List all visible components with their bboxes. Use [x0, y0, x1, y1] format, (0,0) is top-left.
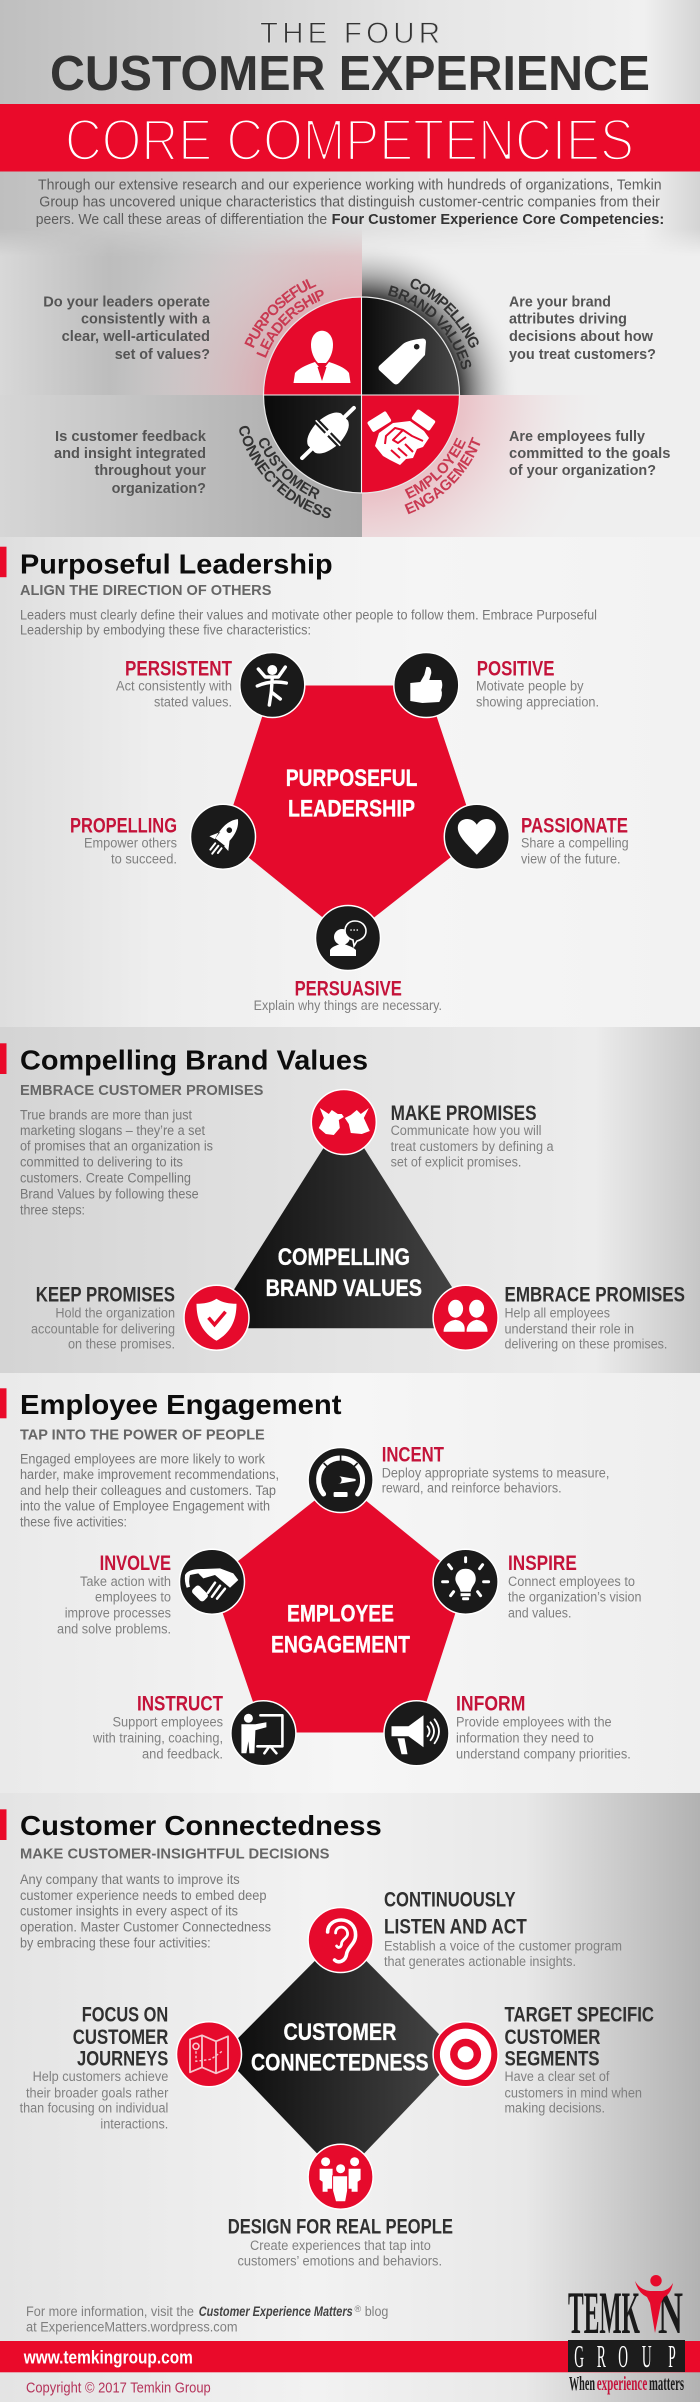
label: incent: Deploy appropriate systems to measure,: [382, 1466, 609, 1481]
label: target specific customer segments: CUSTOMER: [504, 2025, 601, 2049]
label: keep promises: accountable for delivering: [31, 1321, 175, 1336]
label: focus on customer journeys: JOURNEYS: [77, 2047, 168, 2071]
footer note: [26, 2304, 388, 2335]
diamond label: CONNECTEDNESS: [251, 2050, 429, 2077]
body text: into the value of Employee Engagement with: [20, 1499, 270, 1514]
label: keep promises: on these promises.: [68, 1336, 175, 1351]
label: inform: Provide employees with the: [456, 1715, 612, 1730]
panel: header and competency overview: [0, 0, 700, 537]
footer band: www.temkingroup.com: [23, 2346, 193, 2367]
icon: embrace promises people: [433, 1285, 498, 1350]
label: make promises: treat customers by defining a: [391, 1139, 554, 1154]
question: brand: you treat customers?: [509, 347, 656, 363]
label: continuously listen and act: Establish a voice of the customer program: [384, 1939, 622, 1954]
icon: keep promises shield: [184, 1285, 249, 1350]
label: focus on customer journeys: FOCUS ON: [82, 2003, 168, 2027]
question: customer feedback: organization?: [112, 481, 206, 497]
label: instruct: INSTRUCT: [137, 1692, 223, 1716]
icon: plug: [290, 396, 366, 470]
pentagon: [223, 686, 477, 938]
label: passionate: Share a compelling: [521, 836, 629, 851]
body text: Brand Values by following these: [20, 1186, 199, 1201]
label: propelling: [70, 814, 177, 867]
curved label: customer connectedness: CUSTOMER: [259, 438, 320, 500]
label: target specific customer segments: TARGET SPECIFIC: [504, 2003, 654, 2027]
icon: leader bust: [294, 331, 350, 383]
question: employees: [509, 429, 670, 479]
label: propelling: PROPELLING: [70, 814, 177, 838]
label: propelling: Empower others: [84, 836, 177, 851]
curved label: customer connectedness: CONNECTEDNESS: [239, 426, 332, 518]
body text: customers. Create Compelling: [20, 1170, 191, 1185]
pentagon label: [271, 1601, 410, 1659]
label: persuasive: PERSUASIVE: [295, 977, 402, 1001]
subheading: ALIGN THE DIRECTION OF OTHERS: [20, 582, 271, 599]
label: inspire: Connect employees to: [508, 1574, 635, 1589]
footer note: For more information, visit the: [26, 2304, 194, 2319]
body text: Engaged employees are more likely to work: [20, 1451, 265, 1466]
question: employees: Are employees fully: [509, 429, 645, 445]
label: design for real people: DESIGN FOR REAL PEOPLE: [228, 2214, 453, 2238]
label: persuasive: [254, 977, 442, 1013]
label: incent: INCENT: [382, 1443, 444, 1467]
label: inform: understand company priorities.: [456, 1746, 631, 1761]
label: positive: Motivate people by: [476, 679, 584, 694]
label: inform: [456, 1692, 631, 1761]
diamond: [222, 1935, 459, 2178]
intro text: [36, 177, 664, 228]
question: customer feedback: throughout your: [95, 463, 206, 479]
body text: committed to delivering to its: [20, 1155, 183, 1170]
subheading: TAP INTO THE POWER OF PEOPLE: [20, 1426, 265, 1443]
label: incent: reward, and reinforce behaviors.: [382, 1481, 562, 1496]
label: persistent: [116, 657, 232, 710]
icon: make promises: [311, 1090, 376, 1154]
label: positive: [476, 657, 599, 710]
label: persistent: stated values.: [154, 695, 232, 710]
curved label: employee engagement: EMPLOYEE: [404, 438, 466, 499]
four-quadrant circle: [264, 297, 460, 493]
curved label: compelling brand values: COMPELLING: [410, 278, 479, 348]
icon: inform megaphone: [384, 1701, 449, 1766]
question: customer feedback: [54, 429, 207, 497]
label: instruct: with training, coaching,: [92, 1730, 223, 1745]
label: make promises: set of explicit promises.: [391, 1155, 521, 1170]
label: inspire: the organization’s vision: [508, 1590, 642, 1605]
label: design for real people: Create experiences that tap into: [250, 2238, 431, 2253]
body text: [20, 1107, 213, 1217]
heading: Compelling Brand Values: [20, 1044, 368, 1075]
label: keep promises: [31, 1283, 175, 1351]
heading: Customer Connectedness: [20, 1810, 382, 1841]
label: inspire: INSPIRE: [508, 1551, 577, 1575]
question: leaders: clear, well-articulated: [62, 329, 210, 345]
label: instruct: [92, 1692, 223, 1761]
heading: Purposeful Leadership: [20, 548, 333, 579]
body text: harder, make improvement recommendations,: [20, 1467, 279, 1482]
subheading: EMBRACE CUSTOMER PROMISES: [20, 1082, 263, 1099]
body text: Leadership by embodying these five characteristics:: [20, 623, 311, 638]
body text: marketing slogans – they’re a set: [20, 1123, 205, 1138]
question: leaders: [43, 294, 211, 363]
icon: map: [176, 2022, 242, 2087]
label: keep promises: KEEP PROMISES: [36, 1283, 175, 1307]
question: employees: committed to the goals: [509, 446, 670, 462]
quadrant backdrop: [0, 228, 700, 537]
label: persistent: Act consistently with: [116, 679, 232, 694]
question: leaders: set of values?: [115, 347, 210, 363]
label: target specific customer segments: [504, 2003, 654, 2116]
label: embrace promises: [504, 1283, 685, 1351]
question: customer feedback: Is customer feedback: [55, 429, 207, 445]
pentagon: [212, 1480, 466, 1732]
section marker: [0, 547, 6, 577]
logo: temkin group: GROUP: [574, 2340, 676, 2375]
question: brand: attributes driving: [509, 312, 627, 328]
label: involve: employees to: [95, 1590, 171, 1605]
label: involve: INVOLVE: [100, 1551, 171, 1575]
label: focus on customer journeys: interactions.: [100, 2116, 168, 2131]
intro text: Through our extensive research and our experience working with hundreds of organizations, Temkin: [38, 177, 662, 193]
panel: compelling brand values: [0, 1027, 700, 1373]
label: persistent: PERSISTENT: [125, 657, 232, 681]
label: design for real people: customers’ emotions and behaviors.: [238, 2254, 442, 2269]
panel: employee engagement: [0, 1373, 700, 1793]
footer note: Customer Experience Matters: [199, 2304, 353, 2319]
copyright: Copyright © 2017 Temkin Group: [26, 2380, 211, 2396]
label: target specific customer segments: making decisions.: [504, 2101, 605, 2116]
icon: handshake: [367, 409, 436, 465]
body text: customer insights in every aspect of its: [20, 1904, 238, 1919]
label: keep promises: Hold the organization: [55, 1305, 175, 1320]
question: leaders: Do your leaders operate: [43, 294, 210, 310]
icon: positive: [394, 652, 459, 718]
body text: True brands are more than just: [20, 1107, 192, 1122]
footer note: blog: [365, 2304, 388, 2319]
icon: involve handshake: [180, 1549, 244, 1614]
body text: Any company that wants to improve its: [20, 1872, 240, 1887]
body text: customer experience needs to embed deep: [20, 1888, 266, 1903]
label: design for real people: [228, 2214, 453, 2269]
label: positive: POSITIVE: [477, 657, 554, 681]
footer note: at ExperienceMatters.wordpress.com: [26, 2320, 238, 2335]
label: make promises: [391, 1101, 554, 1170]
icon: persistent: [240, 652, 305, 718]
question: brand: [509, 294, 656, 363]
section marker: [0, 1809, 6, 1840]
curved label: purposeful leadership: PURPOSEFUL: [244, 279, 316, 348]
icon: real people: [308, 2144, 373, 2209]
label: involve: and solve problems.: [57, 1621, 171, 1636]
label: passionate: view of the future.: [521, 852, 620, 867]
body text: these five activities:: [20, 1515, 127, 1530]
diamond label: [251, 2019, 429, 2077]
triangle: [210, 1116, 478, 1328]
label: involve: improve processes: [65, 1606, 171, 1621]
intro text: peers. We call these areas of differentiation the: [36, 212, 327, 228]
subheading: MAKE CUSTOMER-INSIGHTFUL DECISIONS: [20, 1845, 330, 1862]
panel: customer connectedness: [0, 1793, 700, 2402]
label: continuously listen and act: [384, 1888, 622, 1969]
logo: temkin group: experience: [597, 2373, 647, 2395]
icon: passionate heart: [444, 804, 509, 869]
label: target specific customer segments: customers in mind when: [504, 2085, 642, 2100]
label: involve: [57, 1551, 171, 1636]
label: involve: Take action with: [80, 1574, 171, 1589]
label: inform: information they need to: [456, 1730, 594, 1745]
label: incent: [382, 1443, 609, 1496]
pentagon label: ENGAGEMENT: [271, 1632, 410, 1659]
pentagon label: [286, 765, 417, 823]
label: embrace promises: delivering on these promises.: [504, 1336, 667, 1351]
section marker: [0, 1388, 6, 1418]
question: customer feedback: and insight integrated: [54, 446, 206, 462]
icon: target: [433, 2022, 498, 2087]
question: brand: decisions about how: [509, 329, 654, 345]
body text: operation. Master Customer Connectedness: [20, 1920, 271, 1935]
footer band: [0, 2341, 700, 2372]
pentagon label: PURPOSEFUL: [286, 765, 417, 792]
intro text: Four Customer Experience Core Competencies:: [332, 212, 664, 228]
logo: temkin group: [568, 2275, 685, 2395]
body text: and help their colleagues and customers. Tap: [20, 1483, 276, 1498]
title banner: core competencies: CORE COMPETENCIES: [65, 108, 634, 173]
body text: Leaders must clearly define their values and motivate other people to follow them. Embrace Purposeful: [20, 607, 597, 622]
label: focus on customer journeys: than focusing on individual: [20, 2101, 168, 2116]
label: continuously listen and act: LISTEN AND ACT: [384, 1914, 527, 1938]
curved label: purposeful leadership: LEADERSHIP: [256, 290, 324, 358]
label: target specific customer segments: Have a clear set of: [504, 2069, 610, 2084]
triangle label: [266, 1244, 422, 1302]
title: customer experience: CUSTOMER EXPERIENCE: [50, 47, 650, 101]
label: instruct: Support employees: [112, 1715, 223, 1730]
label: embrace promises: Help all employees: [504, 1305, 610, 1320]
icon: ear: [308, 1908, 373, 1972]
body text: three steps:: [20, 1202, 85, 1217]
section marker: [0, 1043, 6, 1074]
label: positive: showing appreciation.: [476, 695, 599, 710]
label: focus on customer journeys: [20, 2003, 169, 2131]
triangle label: COMPELLING: [278, 1244, 410, 1271]
body text: [20, 1872, 271, 1950]
label: inform: INFORM: [456, 1692, 525, 1716]
label: propelling: to succeed.: [111, 852, 177, 867]
icon: inspire bulb: [433, 1549, 498, 1614]
logo: temkin group: When: [569, 2373, 595, 2395]
body text: by embracing these four activities:: [20, 1935, 211, 1950]
body text: [20, 607, 597, 638]
curved label: employee engagement: ENGAGEMENT: [404, 436, 480, 514]
label: passionate: PASSIONATE: [521, 814, 628, 838]
curved label: compelling brand values: BRAND VALUES: [388, 286, 472, 370]
triangle label: BRAND VALUES: [266, 1275, 422, 1302]
label: instruct: and feedback.: [142, 1746, 223, 1761]
label: continuously listen and act: CONTINUOUSLY: [384, 1888, 516, 1912]
label: make promises: Communicate how you will: [391, 1123, 542, 1138]
logo figure: [635, 2275, 673, 2333]
label: make promises: MAKE PROMISES: [391, 1101, 537, 1125]
body text: [20, 1451, 279, 1530]
question: employees: of your organization?: [509, 463, 656, 479]
label: persuasive: Explain why things are necessary.: [254, 998, 442, 1013]
label: focus on customer journeys: CUSTOMER: [73, 2025, 169, 2049]
icon: instruct presenter: [231, 1701, 296, 1766]
icon: persuasive speaker: [316, 906, 380, 970]
label: embrace promises: understand their role in: [504, 1321, 634, 1336]
footer note: ®: [354, 2304, 362, 2314]
icon: incent speedometer: [308, 1448, 373, 1512]
intro text: Group has uncovered unique characteristics that distinguish customer-centric companies from their: [39, 195, 660, 211]
question: leaders: consistently with a: [81, 312, 211, 328]
icon: price tag: [378, 338, 426, 384]
title: the four: THE FOUR: [260, 17, 440, 50]
pentagon label: LEADERSHIP: [288, 796, 415, 823]
label: target specific customer segments: SEGMENTS: [504, 2047, 600, 2071]
diamond label: CUSTOMER: [284, 2019, 397, 2046]
label: inspire: [508, 1551, 642, 1621]
heading: Employee Engagement: [20, 1389, 342, 1420]
body text: of promises that an organization is: [20, 1139, 213, 1154]
label: focus on customer journeys: their broader goals rather: [26, 2085, 169, 2100]
panel: purposeful leadership: [0, 537, 700, 1027]
pentagon label: EMPLOYEE: [287, 1601, 394, 1628]
label: continuously listen and act: that generates actionable insights.: [384, 1954, 576, 1969]
question: brand: Are your brand: [509, 294, 611, 310]
icon: propelling rocket: [190, 804, 256, 869]
label: focus on customer journeys: Help customers achieve: [33, 2069, 168, 2084]
label: inspire: and values.: [508, 1606, 571, 1621]
label: passionate: [521, 814, 629, 867]
